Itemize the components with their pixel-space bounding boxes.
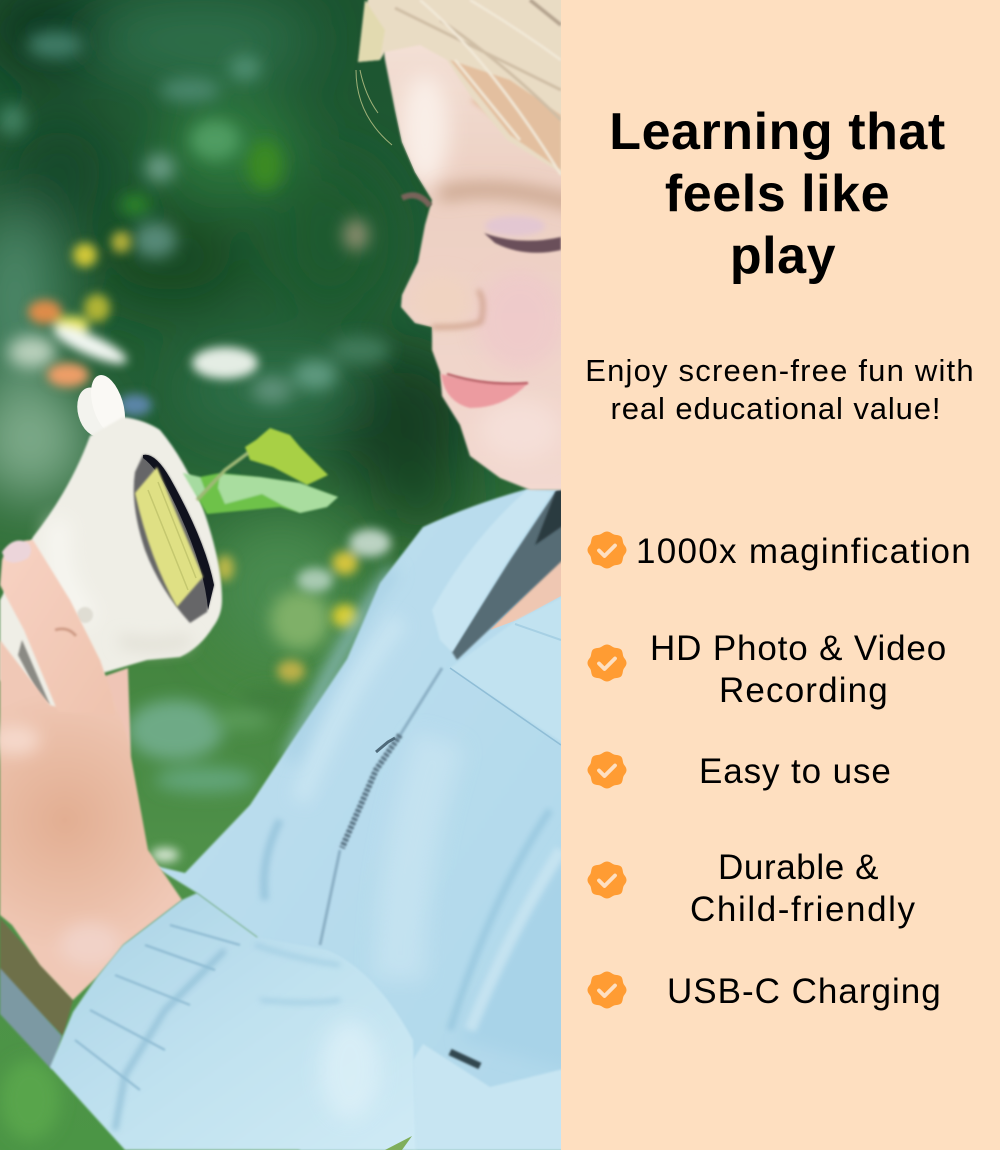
- dark inner collar: [452, 480, 600, 660]
- rear cuff: [0, 968, 62, 1070]
- feature: Durable & Child-friendly: [588, 848, 917, 929]
- icon: badge check: [588, 862, 626, 898]
- stray hairs: [356, 70, 392, 145]
- gathered sleeve: [50, 893, 416, 1150]
- label: Easy to use: [699, 752, 892, 791]
- label: [650, 629, 947, 710]
- small leaves at bottom: [385, 1136, 412, 1150]
- screen bezel: [134, 455, 214, 623]
- lower right fold: [413, 1044, 600, 1150]
- cheek: [490, 305, 549, 357]
- label: USB-C Charging: [667, 972, 942, 1011]
- label: Durable &: [718, 848, 879, 887]
- feature: 1000x magnification: [588, 532, 972, 571]
- feature: Easy to use: [588, 752, 892, 791]
- forehead highlight: [401, 75, 449, 185]
- label: [690, 848, 917, 929]
- label: 1000x maginfication: [636, 532, 972, 571]
- photo: child looking through a toy microscope outdoors: [0, 0, 561, 1150]
- side button: [77, 607, 93, 623]
- icon: badge check: [588, 644, 626, 682]
- feature: HD Photo & Video Recording: [588, 629, 947, 710]
- nose: [406, 282, 433, 334]
- heading: play: [730, 227, 836, 285]
- device shading: [58, 520, 90, 620]
- screen: [135, 467, 203, 607]
- neck: [490, 520, 600, 630]
- subtitle: real educational value!: [611, 391, 941, 426]
- left lapel: [432, 490, 553, 652]
- temple: [470, 98, 483, 112]
- background foliage: [0, 0, 561, 1150]
- right collar: [450, 578, 600, 768]
- olive band behind wrist: [0, 918, 73, 1036]
- heading: feels like: [665, 165, 890, 223]
- icon: badge check: [588, 752, 626, 788]
- label: Recording: [719, 671, 889, 710]
- icon: badge check: [588, 532, 626, 568]
- far lashes: [402, 195, 430, 206]
- icon: badge check: [588, 972, 626, 1008]
- brow shadow: [440, 189, 600, 212]
- toy microscope: [0, 371, 222, 720]
- subtitle: Enjoy screen-free fun with: [585, 353, 975, 388]
- child's face: [382, 44, 561, 492]
- panel: features background: [561, 0, 1000, 1150]
- child's hand: [0, 540, 182, 1000]
- heading: [609, 103, 946, 285]
- zipper: [320, 668, 442, 945]
- eyelid: [487, 216, 543, 235]
- blond hair: [358, 0, 620, 200]
- mouth: [441, 374, 528, 408]
- leaf: [183, 428, 338, 514]
- feature: USB-C Charging: [588, 972, 942, 1011]
- eye lashes: [484, 233, 561, 253]
- heading: Learning that: [609, 103, 946, 161]
- jacket: [152, 480, 600, 1150]
- label: HD Photo & Video: [650, 629, 947, 668]
- label: Child-friendly: [690, 890, 917, 929]
- subtitle: [585, 353, 975, 426]
